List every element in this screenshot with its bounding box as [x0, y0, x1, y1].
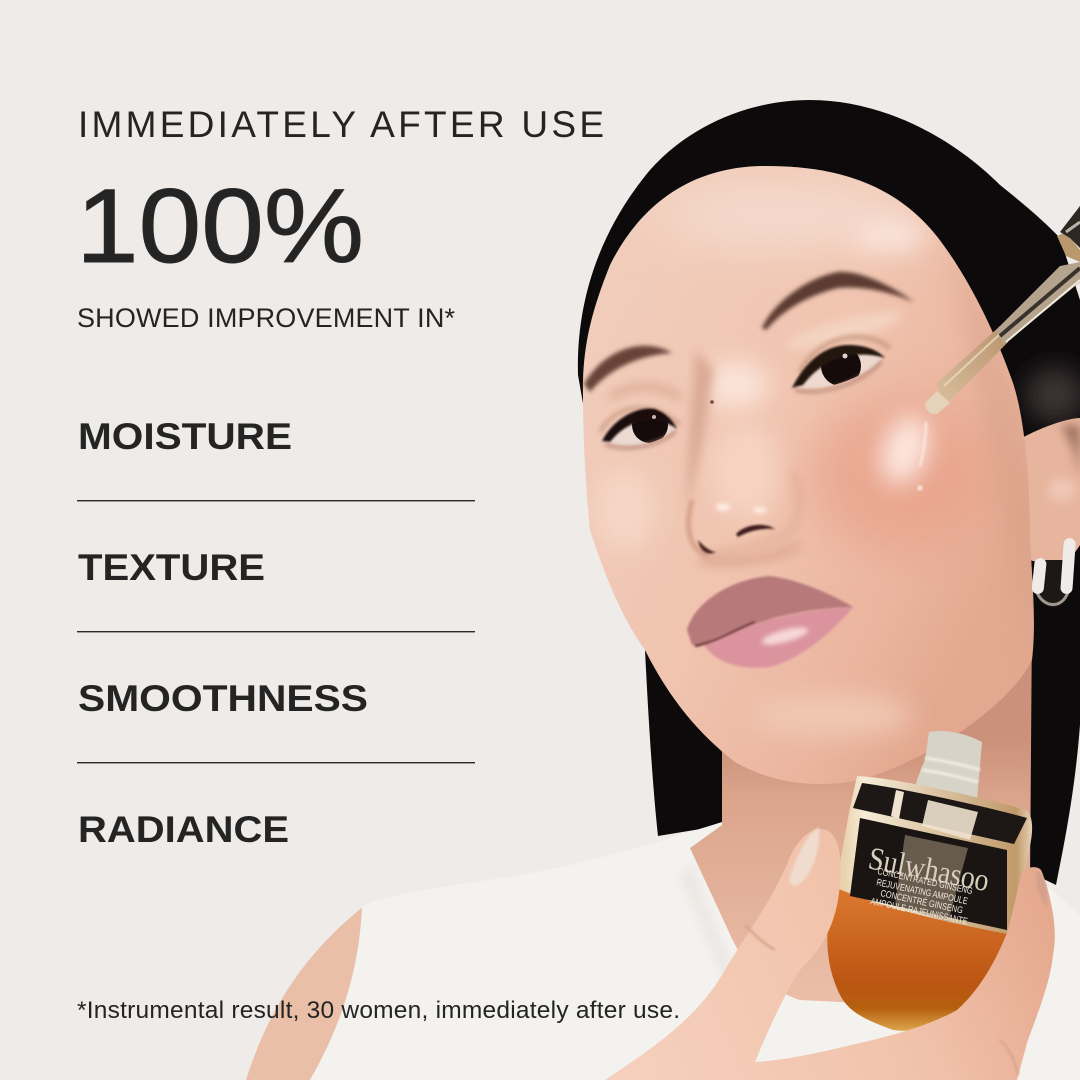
- cap reflections: [891, 790, 978, 840]
- result: moisture: MOISTURE: [78, 416, 292, 457]
- white sleeveless top: [310, 822, 1080, 1080]
- hand holding jar: [605, 827, 1055, 1080]
- jar label: [850, 818, 1007, 930]
- top shading: [680, 860, 760, 1040]
- brand text: Sulwhasoo: [866, 840, 992, 898]
- product description: REJUVENATING AMPOULE: [875, 877, 969, 907]
- nose: [689, 400, 800, 556]
- label reflection: [895, 835, 968, 922]
- eye left: [600, 407, 680, 448]
- dropper bulb tip: [925, 391, 950, 414]
- dropper: [925, 206, 1080, 414]
- text panel: claim and results: [76, 104, 604, 850]
- hair: [578, 100, 1080, 885]
- dropper upper collar: [1060, 206, 1080, 248]
- product: ampoule jar: [827, 731, 1032, 1031]
- product description: CONCENTRATED GINSENG: [876, 866, 974, 897]
- finger crease: [745, 925, 1018, 1075]
- illustration: woman applying ampoule: [246, 100, 1080, 1080]
- jar neck: [915, 731, 982, 800]
- product description: AMPOULE RAJEUNISSANTE: [869, 896, 968, 928]
- result: radiance: RADIANCE: [78, 809, 289, 850]
- dropper gold collar: [1057, 232, 1080, 262]
- lips: [687, 576, 853, 668]
- eyebrow right: [762, 272, 914, 330]
- dropper chrome tube: [996, 262, 1080, 344]
- stat: 100%: 100%: [76, 168, 364, 285]
- footnote: *Instrumental result, 30 women, immediately after use.: [77, 997, 680, 1024]
- neck and chest: [690, 620, 1032, 1003]
- ear: [1018, 418, 1080, 564]
- fingernail right: [1036, 870, 1048, 908]
- jar gold collar: [837, 776, 1032, 934]
- jar cap dark band: [853, 783, 1027, 844]
- face: [583, 166, 1034, 784]
- result: smoothness: SMOOTHNESS: [78, 678, 368, 719]
- subheading: showed improvement in: SHOWED IMPROVEMENT IN*: [77, 303, 455, 333]
- ear detail: [1048, 425, 1080, 502]
- face shading and highlights: [595, 183, 1040, 737]
- eyebrow left: [584, 346, 672, 392]
- heading: immediately after use: IMMEDIATELY AFTER USE: [78, 104, 604, 145]
- product description: CONCENTRÉ GINSENG: [879, 888, 964, 916]
- product description: [869, 866, 974, 928]
- hair sheen near ear: [1025, 367, 1080, 423]
- jar glass with ampoule: [827, 888, 1008, 1031]
- eye right: [792, 337, 890, 392]
- earring: [1031, 538, 1076, 608]
- fingernail left: [789, 827, 819, 886]
- dropper glass tube: [936, 326, 1008, 400]
- result: texture: TEXTURE: [78, 547, 265, 588]
- arm and shoulder: [246, 906, 364, 1080]
